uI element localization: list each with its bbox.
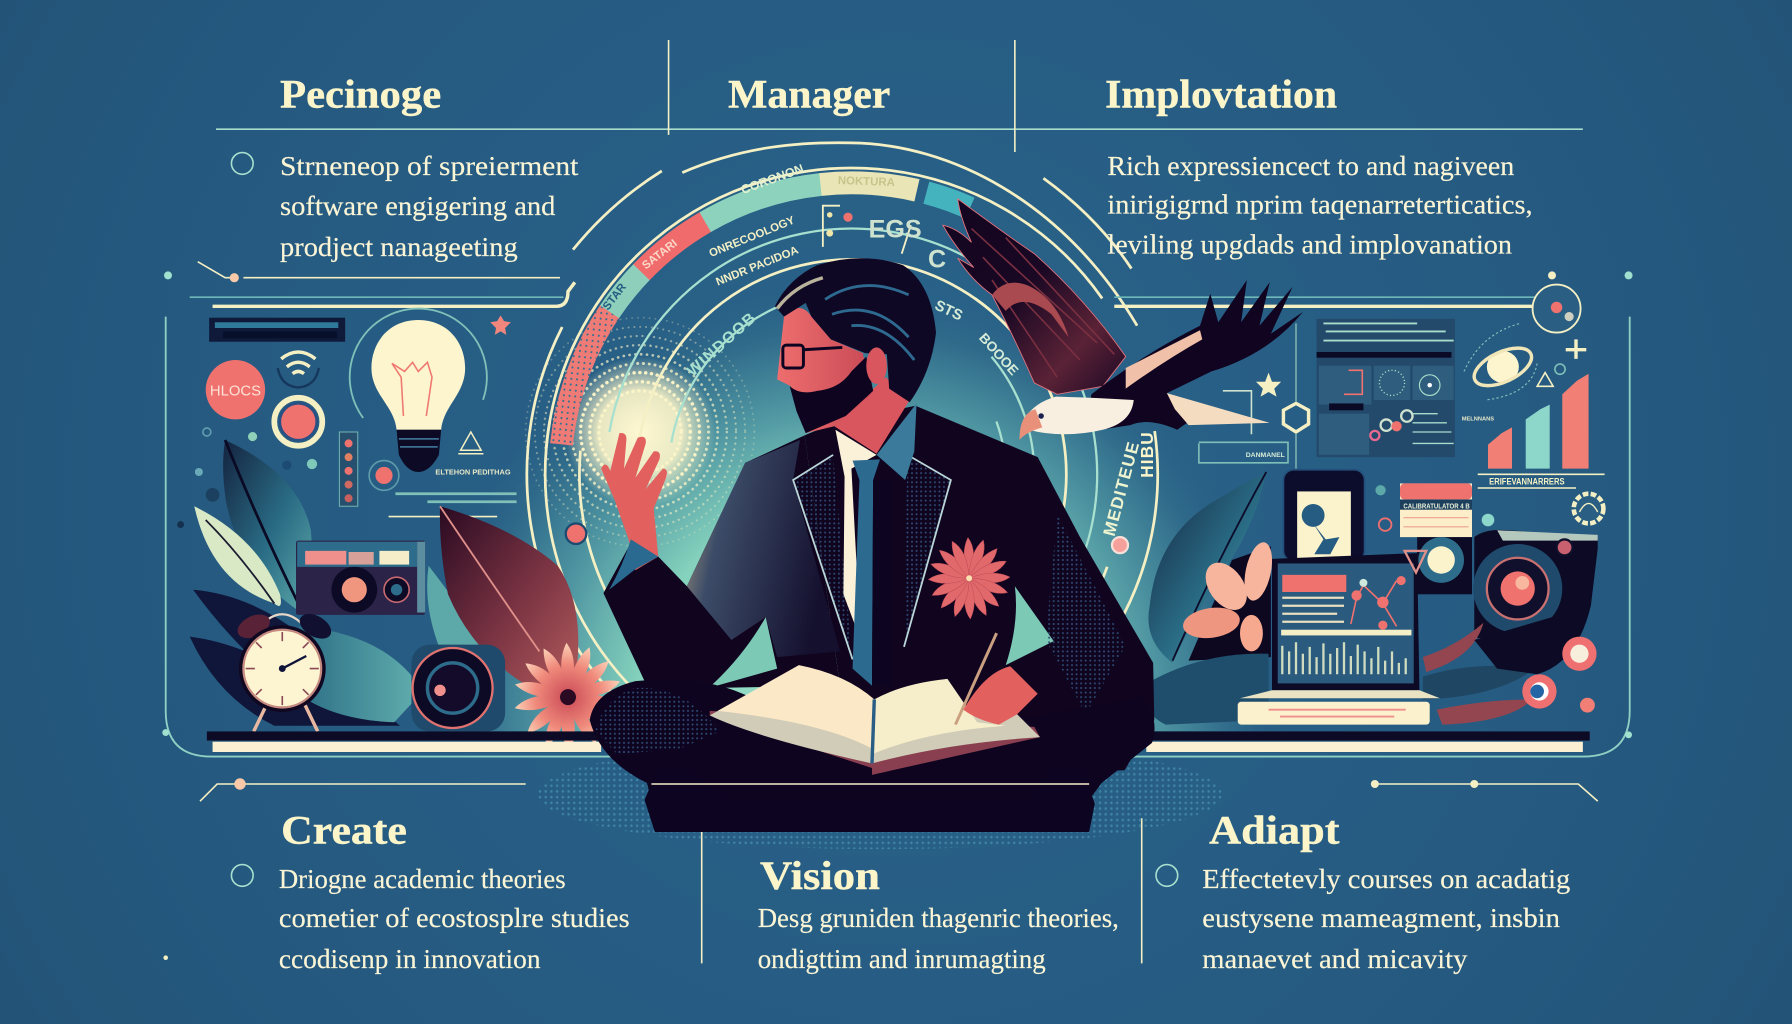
text block: bottom left: ccodisenp in innovation — [279, 944, 541, 974]
head — [1024, 397, 1134, 434]
text block: top left: prodject nanageeting — [280, 232, 518, 262]
ring labels: C — [928, 245, 946, 273]
leaf: dark lower — [1143, 654, 1269, 725]
glasses — [783, 345, 842, 368]
text block: bottom center: Desg gruniden thagenric theories, — [758, 903, 1119, 933]
ring labels — [601, 162, 1157, 538]
alarm clock — [234, 609, 335, 731]
text block: bottom left — [231, 864, 630, 974]
teal gap right — [1006, 586, 1054, 665]
bar chart: ERIFEVANNARRERS — [1489, 477, 1565, 487]
face — [777, 308, 871, 433]
text block: bottom right: eustysene mameagment, insbin — [1202, 903, 1560, 933]
flower: five petals — [1181, 540, 1277, 651]
pen — [955, 633, 997, 725]
badge HLOCS — [206, 360, 265, 419]
leaf: teal lower — [295, 566, 486, 722]
eagle — [943, 199, 1303, 440]
ring labels: CORONON — [739, 162, 806, 197]
laptop — [1238, 551, 1440, 725]
jacket halftone — [793, 457, 1126, 714]
icon: wifi — [278, 352, 319, 387]
legend strip — [339, 432, 358, 506]
heading: Create: Create — [281, 807, 407, 852]
ring segments and arcs — [525, 141, 1160, 692]
teal gap left — [709, 617, 777, 688]
ring labels: SATARI — [640, 238, 680, 272]
ring labels: NNDR PACIDOA — [714, 244, 800, 288]
right scene: icons — [1199, 285, 1605, 531]
ring labels: STAR — [601, 282, 629, 313]
small dots — [1375, 485, 1494, 531]
text block: bottom right — [1156, 864, 1571, 974]
text block: bottom center — [758, 903, 1119, 974]
text block: top right: inirigigrnd nprim taqenarreterticatics, — [1107, 190, 1533, 220]
writing hand — [963, 666, 1038, 725]
status bar — [209, 318, 345, 342]
ground line — [651, 783, 1089, 785]
legs — [590, 680, 1155, 800]
icon: gear — [1574, 494, 1603, 523]
left scene: icons — [177, 283, 517, 528]
dots — [177, 428, 317, 528]
icon: planet — [1464, 323, 1537, 400]
left scene: plants and objects — [190, 440, 623, 752]
fine text — [389, 467, 517, 517]
small lens — [1417, 537, 1472, 594]
beard — [790, 357, 873, 433]
heading: Implovtation: Implovtation — [1105, 71, 1337, 116]
dark connector — [1474, 606, 1591, 674]
text block: top right: Rich expressiencect to and nagiveen — [1107, 151, 1515, 181]
icon: star — [1256, 373, 1281, 397]
text block: top right: leviling upgdads and implovanation — [1107, 230, 1512, 260]
dashboard panel — [1317, 319, 1455, 457]
open book — [710, 665, 1040, 775]
ring labels: MEDITEUE — [1099, 439, 1143, 538]
leaf: pale — [194, 506, 281, 606]
text block: top left: Strneneop of spreierment — [280, 151, 579, 181]
torso and right arm — [805, 406, 1154, 777]
icon: plus, triangle and ring — [1537, 339, 1586, 386]
tie — [853, 459, 891, 686]
lapel edges — [793, 455, 951, 659]
ring labels: STS — [932, 298, 965, 324]
beak — [1019, 409, 1042, 440]
wing feathers — [971, 229, 1114, 377]
leaf: maroon pair — [1423, 623, 1533, 725]
icon: star — [490, 315, 511, 335]
icon: orbit badge — [1533, 285, 1581, 333]
bar chart — [1462, 374, 1605, 488]
raised arm — [603, 435, 840, 688]
figure: man with book — [590, 258, 1155, 832]
phone — [1283, 470, 1365, 561]
coral feather band — [992, 283, 1069, 337]
retro camera — [296, 541, 425, 615]
icon: hexagon node — [1283, 323, 1309, 469]
hair — [775, 258, 936, 402]
infographic canvas — [162, 40, 1633, 974]
callout box: DANMANEL — [1246, 452, 1285, 459]
text block: bottom center: ondigttim and inrumagting — [758, 944, 1046, 974]
frame and connector lines — [162, 40, 1633, 963]
heading: Pecinoge: Pecinoge — [280, 71, 441, 116]
fine text: ELTEHON PEDITHAG — [435, 467, 511, 476]
text block: bottom right: manaevet and micavity — [1202, 944, 1468, 974]
shoes — [645, 767, 1095, 832]
ring labels: NOKTURA — [838, 175, 895, 189]
icon: record target — [274, 398, 322, 446]
leaf: dark lower — [190, 590, 400, 726]
text block: top left — [231, 151, 579, 262]
heading: Vision: Vision — [760, 853, 880, 898]
eye — [1038, 413, 1044, 419]
text block: top right — [1107, 151, 1533, 260]
wing highlight — [1126, 330, 1202, 389]
card widget: CALIBRATULATOR 4 B — [1403, 502, 1470, 511]
icon: light bulb — [325, 283, 512, 472]
badge HLOCS: HLOCS — [210, 383, 261, 399]
bar chart: MELNNANS — [1462, 417, 1494, 423]
lens camera — [411, 645, 505, 731]
halftone floor — [538, 758, 1222, 850]
leaf: dark right — [1423, 666, 1535, 699]
right wing and body — [1086, 280, 1303, 432]
ring labels: EGS — [869, 216, 922, 244]
text block: bottom right: Effectetevly courses on acadatig — [1202, 864, 1571, 894]
heading: Manager: Manager — [728, 71, 890, 116]
callout box — [1199, 391, 1288, 463]
heading: Adiapt: Adiapt — [1209, 807, 1340, 852]
right scene: plants and objects — [1143, 470, 1598, 725]
text block: bottom left: Driogne academic theories — [279, 864, 566, 894]
colored rings — [1522, 637, 1597, 713]
icon: triangle — [458, 432, 483, 454]
lit jacket side — [687, 440, 840, 657]
central radial ring diagram — [489, 316, 1242, 732]
cuff — [609, 539, 658, 590]
camera — [1473, 530, 1598, 640]
knee shading — [595, 688, 720, 754]
raised hand — [601, 433, 667, 570]
ear — [866, 347, 887, 384]
card widget — [1400, 483, 1472, 537]
chest flower — [928, 537, 1010, 619]
neck — [834, 377, 910, 454]
ring labels: WINDOOB — [684, 309, 760, 380]
leaf: maroon — [440, 506, 578, 691]
text block: bottom left: cometier of ecostosplre studies — [279, 903, 630, 933]
flower: large peach — [513, 643, 623, 752]
text block: top left: software engigering and — [280, 191, 556, 221]
left wing — [943, 199, 1126, 394]
leaf: dark teal large — [1148, 472, 1266, 663]
dark shade behind flower — [1189, 546, 1271, 661]
ring labels: BOOOE — [976, 330, 1021, 378]
shelf — [207, 731, 1590, 752]
small coral node — [369, 461, 399, 490]
tail — [1167, 393, 1270, 425]
ring labels: HIBU — [1137, 431, 1157, 478]
ring labels: ONRECOOLOGY — [707, 214, 797, 260]
leaf: dark teal large — [223, 440, 312, 611]
shirt and collar — [835, 430, 877, 640]
